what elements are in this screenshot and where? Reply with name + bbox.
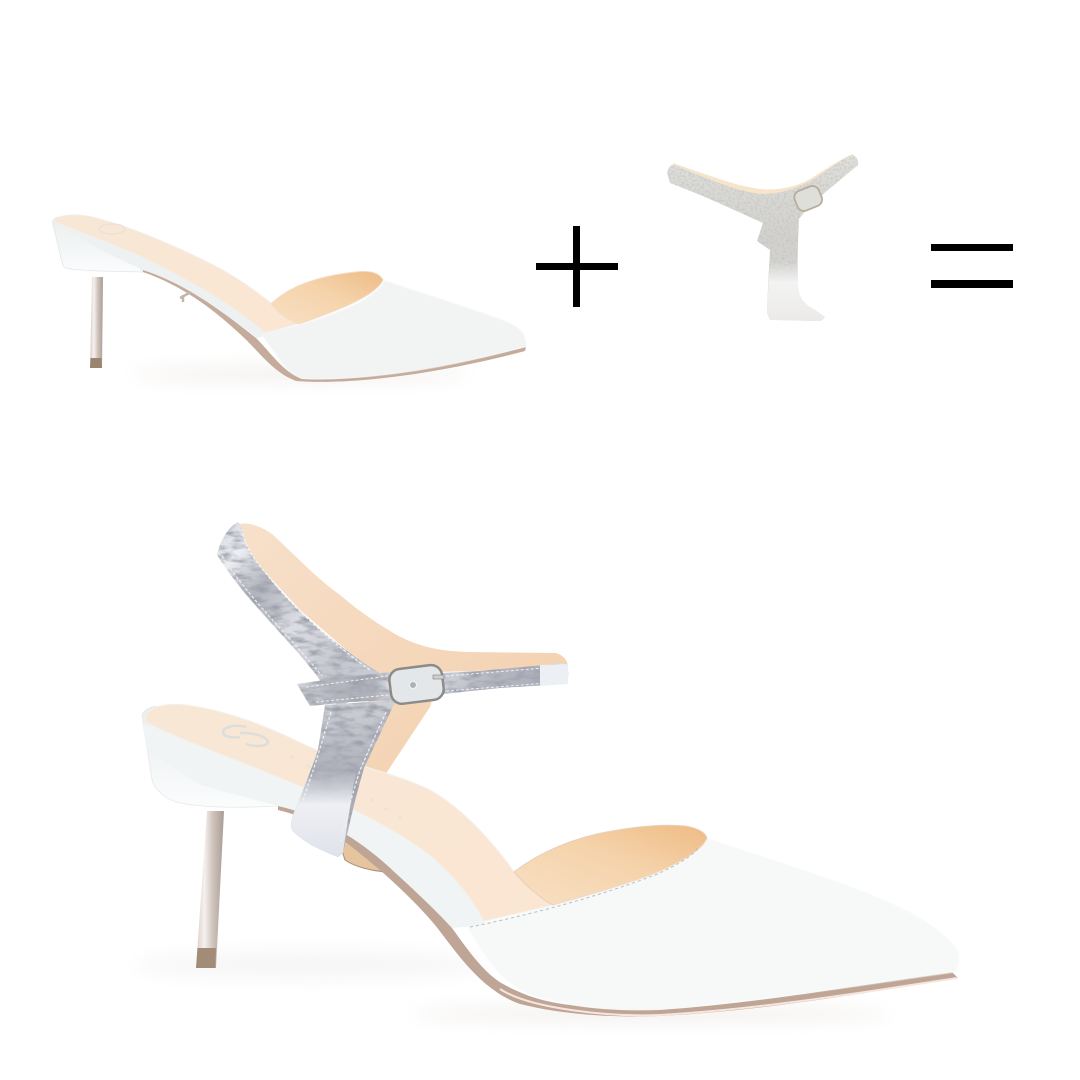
strap lining xyxy=(673,154,856,199)
mule ornament xyxy=(180,292,191,302)
strap body xyxy=(667,155,858,321)
silver back strap xyxy=(217,522,393,707)
stiletto pin xyxy=(196,811,224,968)
buckle xyxy=(388,664,445,705)
mule insole xyxy=(55,215,297,333)
strap tail through buckle xyxy=(297,672,394,706)
mule side wall xyxy=(57,222,267,338)
vamp xyxy=(468,839,959,1008)
mule floor shadow xyxy=(130,368,470,380)
strap highlight xyxy=(767,262,825,321)
equals sign xyxy=(931,244,1013,288)
heel cap xyxy=(142,706,278,807)
vamp stitching xyxy=(470,848,698,927)
large slingback shoe xyxy=(135,522,959,1019)
mule vamp xyxy=(261,281,526,378)
small mule shoe xyxy=(53,215,526,382)
heel tab under strap xyxy=(338,838,391,872)
insole logo xyxy=(223,726,268,746)
vertical silver strap xyxy=(291,700,396,857)
sole edge xyxy=(278,806,958,1016)
mule heel cap xyxy=(53,217,143,272)
insole xyxy=(146,704,553,921)
mule sole edge xyxy=(143,270,526,382)
inner lining xyxy=(514,825,707,905)
front silver strap xyxy=(442,663,568,694)
strap lining xyxy=(240,524,568,775)
side wall xyxy=(142,722,486,928)
mule insole logo xyxy=(99,224,125,234)
plus sign xyxy=(536,226,618,307)
sole light underside xyxy=(500,978,957,1015)
small detached strap xyxy=(667,154,858,321)
large floor shadow xyxy=(135,951,890,1019)
mule stiletto pin xyxy=(90,277,103,368)
insole brand dots xyxy=(290,755,402,820)
mule inner lining xyxy=(271,271,383,324)
small buckle xyxy=(792,184,824,213)
